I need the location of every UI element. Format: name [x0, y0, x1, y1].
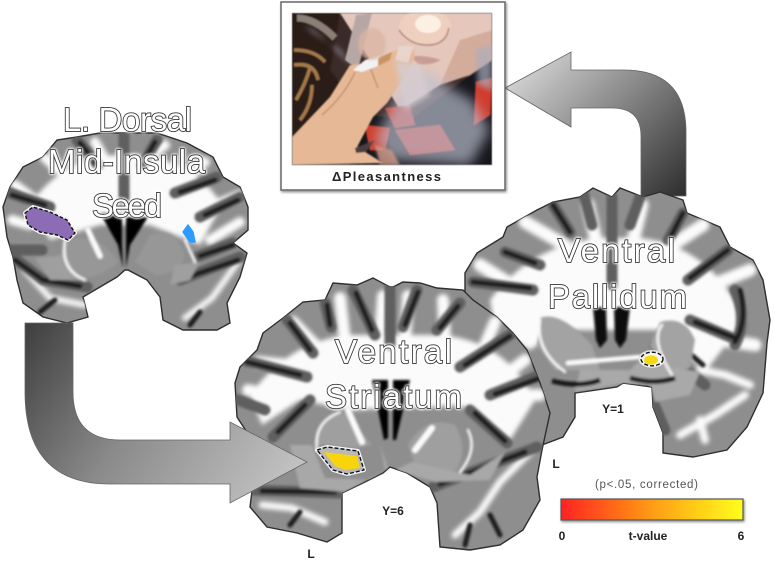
slice coordinate: Y=6: Y=6: [382, 504, 404, 518]
label: L. Dorsal Mid-Insula Seed: [48, 101, 206, 224]
striatum: [537, 317, 600, 370]
striatum: [317, 413, 372, 448]
scale minimum: 0: [559, 529, 566, 543]
striatum: [62, 239, 115, 278]
photo: smoking close-up: [292, 9, 492, 165]
hemisphere marker: ventral striatum slice: L: [307, 547, 315, 561]
hemisphere marker: ventral pallidum slice: L: [552, 457, 560, 471]
ventricles: [372, 380, 410, 440]
slice coordinate: Y=1: Y=1: [602, 402, 624, 416]
card frame: [281, 2, 505, 190]
label: ventral striatum: [325, 333, 462, 415]
label: ventral striatum: Ventral: [335, 333, 452, 370]
colour bar: [561, 499, 743, 520]
arrow: pallidum to pleasantness: [505, 52, 686, 196]
scale title: t-value: [629, 529, 668, 543]
label: L. Dorsal Mid-Insula Seed: L. Dorsal: [63, 101, 192, 138]
seed region: left dorsal mid-insula: [25, 207, 75, 240]
panel: insula seed brain slice: [3, 101, 248, 330]
brain interior tissue: [238, 287, 540, 545]
brain interior tissue: [10, 135, 240, 325]
label: L. Dorsal Mid-Insula Seed: Seed: [92, 187, 162, 224]
brain outline: [235, 278, 550, 550]
ventricles: [593, 307, 630, 348]
brain outline: [465, 188, 770, 463]
ventricles: [100, 213, 148, 268]
activation: ventral striatum cluster: [317, 447, 364, 474]
label: ventral striatum: Striatum: [325, 378, 462, 415]
caption: ΔPleasantness: [332, 169, 441, 184]
label: ventral pallidum: Ventral: [558, 232, 675, 269]
panel: pleasantness photo card: [281, 2, 505, 190]
arrow: insula seed to ventral striatum: [25, 323, 307, 503]
label: ventral pallidum: Pallidum: [548, 278, 687, 315]
panel: ventral striatum brain slice: [235, 278, 550, 550]
panel: ventral pallidum brain slice: [465, 188, 770, 463]
label: ventral pallidum: [548, 232, 687, 315]
activation: ventral pallidum cluster: [639, 350, 665, 368]
label: L. Dorsal Mid-Insula Seed: Mid-Insula: [48, 143, 206, 180]
photo border: [292, 13, 492, 165]
significance note: (p<.05, corrected): [595, 479, 698, 491]
brain interior tissue: [473, 195, 755, 440]
activation: blue right insula: [183, 225, 195, 242]
legend: t-value colour scale: [559, 479, 745, 543]
scale maximum: 6: [738, 529, 745, 543]
brain outline: [3, 133, 248, 330]
